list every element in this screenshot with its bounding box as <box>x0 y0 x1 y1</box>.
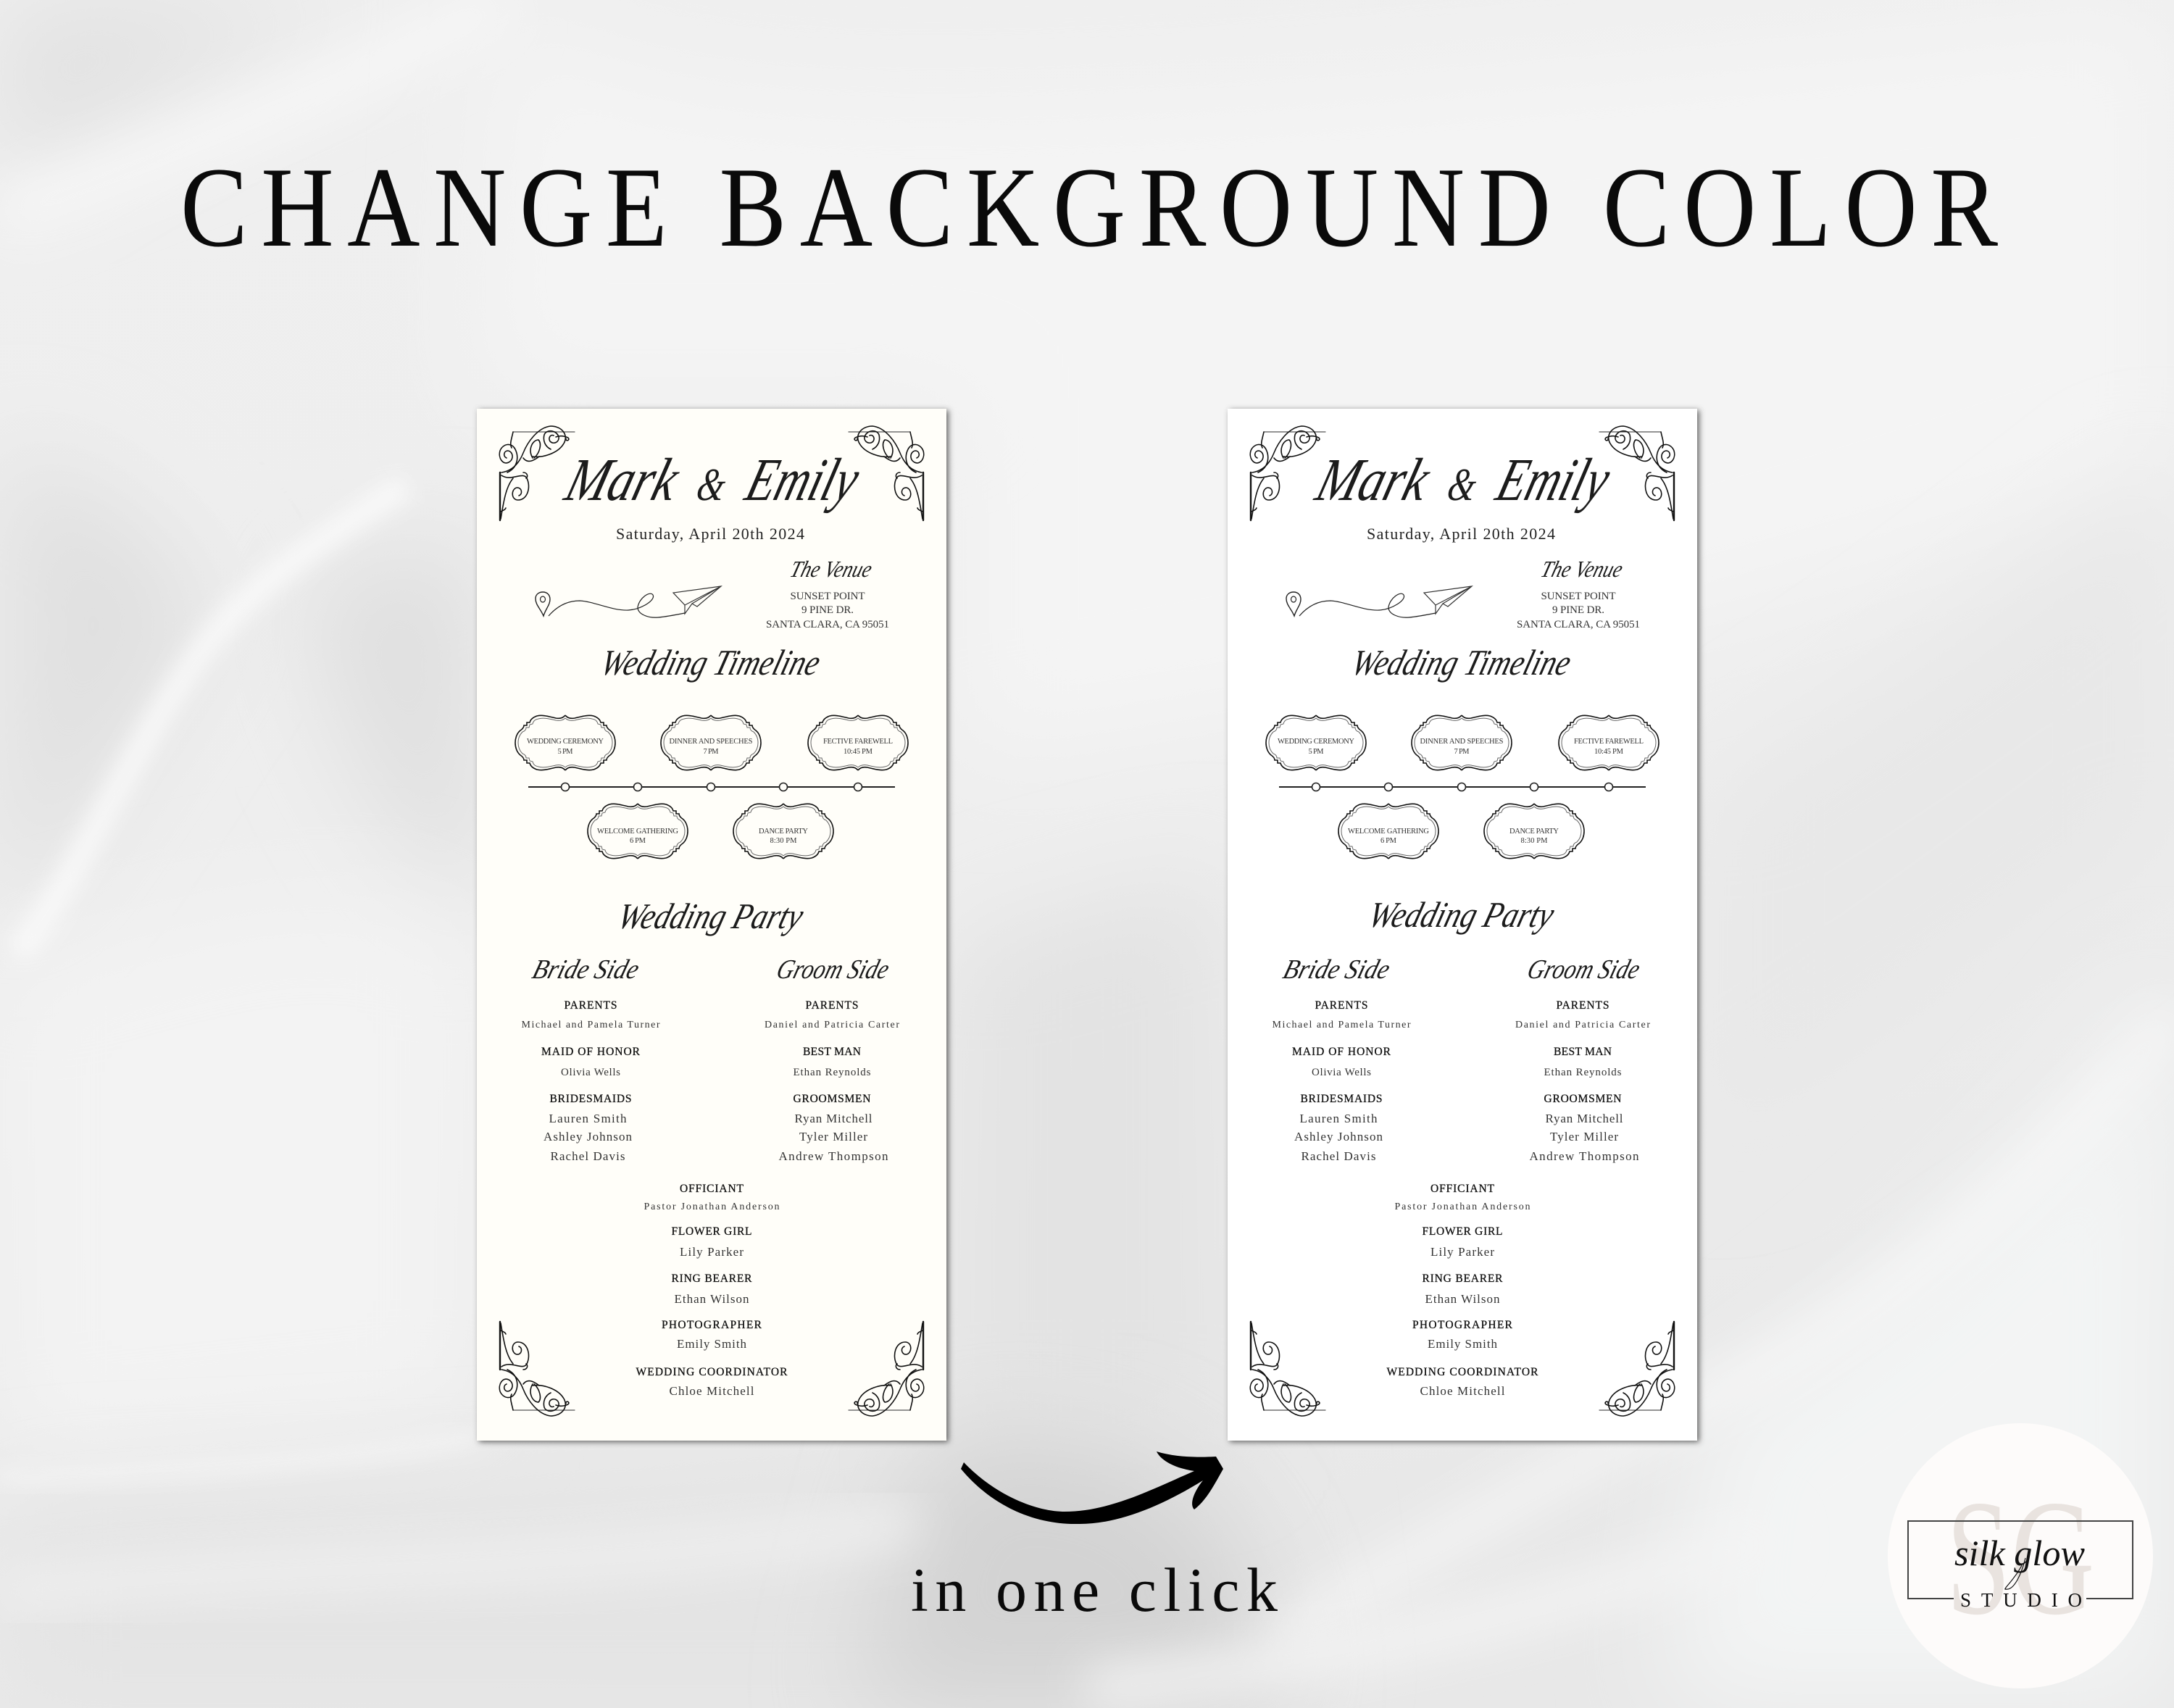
officiant and helpers list: Ethan Wilson <box>1425 1292 1500 1306</box>
event: festive farewell: FECTIVE FAREWELL <box>1574 738 1644 746</box>
heading: wedding timeline: Wedding Timeline <box>596 643 825 683</box>
event: welcome gathering <box>588 804 688 859</box>
bride side list: Ashley Johnson <box>544 1130 632 1143</box>
officiant and helpers list: Chloe Mitchell <box>670 1384 754 1398</box>
officiant and helpers list: WEDDING COORDINATOR <box>636 1366 788 1378</box>
groom side list: Ryan Mitchell <box>1545 1112 1623 1125</box>
groom side list: Ryan Mitchell <box>794 1112 872 1125</box>
panel: cream card <box>477 409 946 1441</box>
event: dance party <box>1484 804 1584 859</box>
logo badge circle <box>1888 1423 2153 1688</box>
event: dance party: 8:30 PM <box>770 837 797 845</box>
officiant and helpers list: Pastor Jonathan Anderson <box>1394 1201 1530 1212</box>
couple names: Emily <box>1489 446 1618 514</box>
bride side list: Lauren Smith <box>1300 1112 1378 1125</box>
officiant and helpers list: OFFICIANT <box>680 1183 744 1195</box>
officiant and helpers list: WEDDING COORDINATOR <box>1387 1366 1538 1378</box>
officiant and helpers list: Ethan Wilson <box>674 1292 749 1306</box>
event: dance party: 8:30 PM <box>1520 837 1548 845</box>
logo frame <box>1908 1521 2133 1599</box>
event: wedding ceremony: WEDDING CEREMONY <box>527 738 604 746</box>
groom side list: Daniel and Patricia Carter <box>765 1020 899 1030</box>
heading: wedding party: Wedding Party <box>613 897 808 937</box>
card background: white <box>1228 409 1697 1441</box>
event: dinner and speeches <box>661 715 761 770</box>
event: dinner and speeches: DINNER AND SPEECHES <box>670 738 753 746</box>
event: wedding ceremony <box>515 715 615 770</box>
timeline line <box>528 786 895 788</box>
bride side list: Rachel Davis <box>551 1149 625 1163</box>
groom side list: Groom Side <box>773 954 893 985</box>
event: dinner and speeches: 7 PM <box>1454 748 1470 756</box>
event: welcome gathering: WELCOME GATHERING <box>1348 828 1429 836</box>
groom side list: Andrew Thompson <box>1529 1149 1639 1163</box>
venue: The Venue <box>787 557 875 583</box>
timeline <box>1266 715 1659 859</box>
date: Saturday, April 20th 2024 <box>616 525 804 543</box>
timeline markers <box>561 783 862 791</box>
bride side list: Lauren Smith <box>549 1112 627 1125</box>
bride side list: Michael and Pamela Turner <box>522 1020 660 1030</box>
groom side list: BEST MAN <box>1554 1046 1612 1058</box>
logo script name: silk glow <box>1954 1533 2085 1573</box>
groom side list: GROOMSMEN <box>1544 1093 1622 1105</box>
bride side list: Olivia Wells <box>561 1067 620 1078</box>
groom side list: Daniel and Patricia Carter <box>1515 1020 1650 1030</box>
event: wedding ceremony <box>1266 715 1366 770</box>
logo: silk glow studio <box>1888 1423 2153 1688</box>
event: festive farewell: FECTIVE FAREWELL <box>823 738 893 746</box>
date: Saturday, April 20th 2024 <box>1367 525 1555 543</box>
bride side list <box>522 954 660 1163</box>
ornamental corners <box>1250 426 1675 1416</box>
groom side list: Groom Side <box>1524 954 1644 985</box>
bride side list <box>1273 954 1411 1163</box>
officiant and helpers list: Chloe Mitchell <box>1420 1384 1505 1398</box>
bride side list: Bride Side <box>529 954 643 985</box>
event: wedding ceremony: 5 PM <box>1309 748 1324 756</box>
event: dance party: DANCE PARTY <box>1509 828 1559 836</box>
event: festive farewell <box>1559 715 1659 770</box>
groom side list: Ethan Reynolds <box>793 1067 871 1078</box>
event: dinner and speeches: DINNER AND SPEECHES <box>1420 738 1504 746</box>
officiant and helpers list: RING BEARER <box>1422 1272 1503 1285</box>
bride side list: MAID OF HONOR <box>1292 1046 1391 1058</box>
officiant and helpers list: Emily Smith <box>1428 1337 1497 1351</box>
bride side list: Rachel Davis <box>1302 1149 1375 1163</box>
officiant and helpers list: OFFICIANT <box>1430 1183 1495 1195</box>
bride side list: Olivia Wells <box>1312 1067 1371 1078</box>
event: welcome gathering <box>1338 804 1438 859</box>
monogram SG: SG <box>1946 1467 2094 1649</box>
groom side list: GROOMSMEN <box>793 1093 871 1105</box>
couple names: Emily <box>738 446 867 514</box>
venue: 9 PINE DR. <box>1552 604 1604 616</box>
event: wedding ceremony: WEDDING CEREMONY <box>1278 738 1354 746</box>
couple names: Mark <box>558 446 688 514</box>
event: welcome gathering: 6 PM <box>630 837 646 845</box>
logo word: studio: STUDIO <box>1960 1589 2082 1611</box>
event: festive farewell: 10:45 PM <box>1594 748 1624 756</box>
bride side list: PARENTS <box>1315 999 1368 1012</box>
event: welcome gathering: WELCOME GATHERING <box>597 828 678 836</box>
officiant and helpers list: Lily Parker <box>680 1245 744 1259</box>
bride side list: Bride Side <box>1280 954 1394 985</box>
arrow <box>961 1451 1223 1524</box>
panel: white card <box>1228 409 1697 1441</box>
event: festive farewell: 10:45 PM <box>844 748 873 756</box>
officiant and helpers list: PHOTOGRAPHER <box>662 1319 762 1331</box>
groom side list: Ethan Reynolds <box>1544 1067 1622 1078</box>
officiant and helpers list: FLOWER GIRL <box>1422 1225 1503 1238</box>
groom side list: Andrew Thompson <box>778 1149 888 1163</box>
venue: SANTA CLARA, CA 95051 <box>1517 619 1640 630</box>
timeline <box>515 715 908 859</box>
venue: SUNSET POINT <box>1541 591 1616 602</box>
event: festive farewell <box>808 715 908 770</box>
couple names: Mark <box>1309 446 1438 514</box>
heading: wedding party: Wedding Party <box>1364 896 1559 936</box>
event: wedding ceremony: 5 PM <box>558 748 573 756</box>
event: dance party <box>733 804 833 859</box>
venue <box>1517 557 1640 630</box>
bride side list: Michael and Pamela Turner <box>1273 1020 1411 1030</box>
icon: paper plane route <box>536 586 721 617</box>
timeline markers <box>1312 783 1613 791</box>
groom side list: PARENTS <box>806 999 858 1012</box>
venue <box>766 557 889 630</box>
officiant and helpers list: Emily Smith <box>677 1337 746 1351</box>
couple names <box>1309 446 1618 514</box>
ornamental corners <box>499 426 924 1416</box>
groom side list <box>1515 954 1650 1163</box>
officiant and helpers list: FLOWER GIRL <box>671 1225 752 1238</box>
groom side list <box>765 954 899 1163</box>
caption: in one click: in one click <box>911 1555 1278 1625</box>
couple names: & <box>1444 459 1480 510</box>
couple names: & <box>694 459 730 510</box>
bride side list: Ashley Johnson <box>1294 1130 1383 1143</box>
couple names <box>558 446 867 514</box>
venue: SANTA CLARA, CA 95051 <box>766 619 889 630</box>
bride side list: PARENTS <box>564 999 617 1012</box>
groom side list: Tyler Miller <box>799 1130 867 1143</box>
title: CHANGE BACKGROUND COLOR <box>180 144 1999 271</box>
event: welcome gathering: 6 PM <box>1380 837 1397 845</box>
event: dance party: DANCE PARTY <box>759 828 808 836</box>
heading: wedding timeline: Wedding Timeline <box>1347 643 1575 683</box>
event: dinner and speeches: 7 PM <box>703 748 719 756</box>
officiant and helpers list <box>636 1183 788 1398</box>
bride side list: BRIDESMAIDS <box>1300 1093 1383 1105</box>
card background: cream <box>477 409 946 1441</box>
venue: The Venue <box>1538 557 1625 583</box>
groom side list: Tyler Miller <box>1550 1130 1618 1143</box>
officiant and helpers list <box>1387 1183 1538 1398</box>
venue: SUNSET POINT <box>790 591 865 602</box>
officiant and helpers list: Lily Parker <box>1430 1245 1494 1259</box>
venue: 9 PINE DR. <box>801 604 854 616</box>
bride side list: BRIDESMAIDS <box>549 1093 632 1105</box>
groom side list: BEST MAN <box>803 1046 861 1058</box>
icon: paper plane route <box>1286 586 1472 617</box>
event: dinner and speeches <box>1412 715 1512 770</box>
officiant and helpers list: PHOTOGRAPHER <box>1412 1319 1513 1331</box>
officiant and helpers list: RING BEARER <box>671 1272 752 1285</box>
bride side list: MAID OF HONOR <box>541 1046 641 1058</box>
groom side list: PARENTS <box>1557 999 1609 1012</box>
timeline line <box>1279 786 1646 788</box>
officiant and helpers list: Pastor Jonathan Anderson <box>644 1201 780 1212</box>
